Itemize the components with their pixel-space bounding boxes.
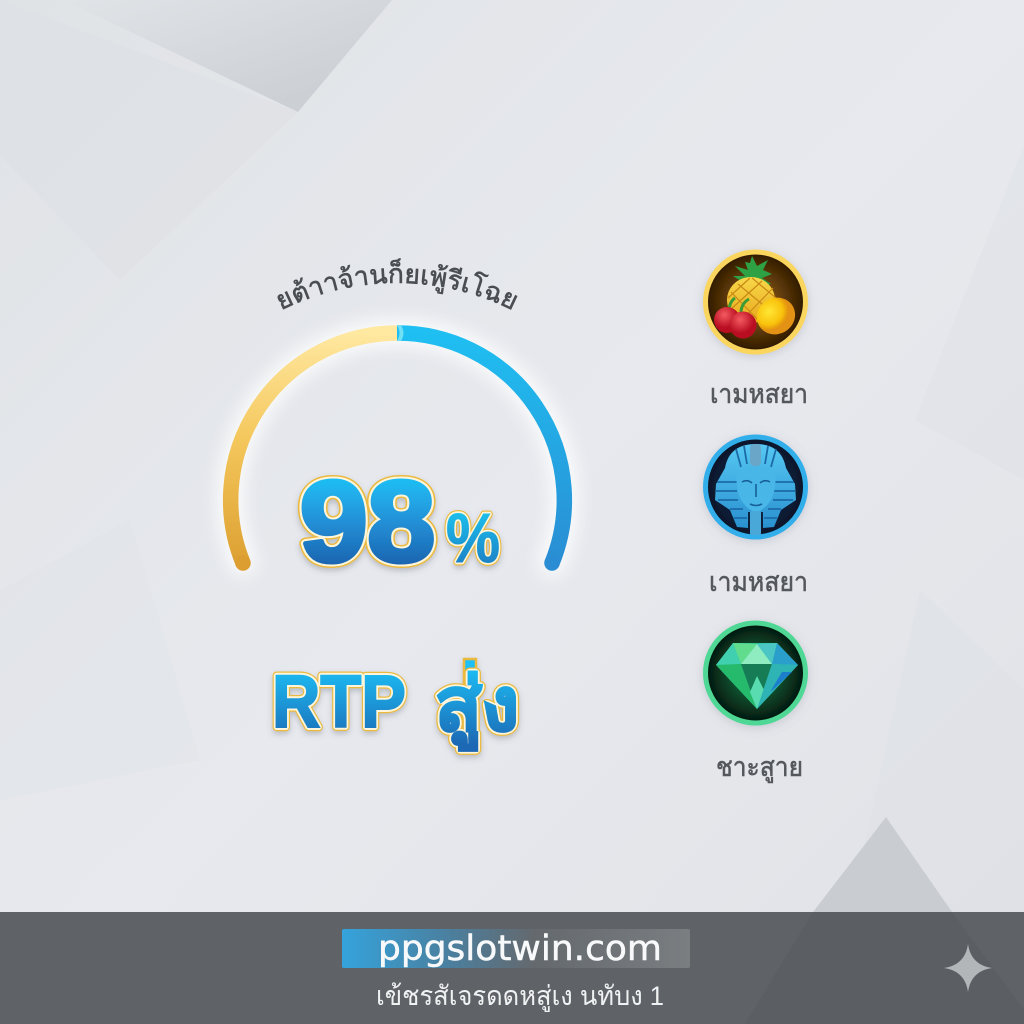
pharaoh face [737,466,775,513]
footer bar [0,912,1024,1024]
footer tagline: เข้ชรสัเจรดดหสู่เง นทับง 1 [376,981,664,1012]
pineapple body [727,277,776,323]
URL highlight [342,929,690,968]
gauge end cap right [544,555,560,571]
RTP heading: สู่ง [435,663,519,751]
label: fruit: เามหสยา [710,379,808,409]
98 percent value: 98 [300,459,435,586]
gauge arc [230,325,564,571]
RTP heading [272,659,519,751]
gauge blue segment [397,333,564,563]
gauge joint [397,325,404,341]
curved gauge caption: ยต้าาจ้านก็ยเพู้รีเโฉย [278,258,518,310]
RTP heading: RTP [272,660,406,743]
gauge end cap left [235,555,251,571]
nemes headdress [715,444,796,528]
URL text: ppgslotwin.com [378,929,662,969]
pharaoh cobra [750,444,761,466]
icon: fruit [706,252,806,352]
label: pharaoh: เามหสยา [709,567,808,597]
RTP heading: สู่ง [435,663,519,751]
lemon [750,291,802,341]
icon: pharaoh [706,437,806,537]
diamond crown and facets [716,643,798,709]
label: diamond: ชาะสูาย [716,752,803,783]
98 percent value: % [446,499,500,577]
98 percent value: % [446,499,500,577]
98 percent value: 98 [300,459,435,586]
pharaoh beard [750,511,761,535]
pineapple leaves [733,256,772,288]
RTP heading: RTP [272,660,406,743]
icon: sparkle [944,944,992,992]
cherries [714,298,756,338]
RTP heading: สู่ง [435,663,519,751]
98 percent value: % [446,499,500,577]
98 percent value [300,459,500,586]
RTP heading: RTP [272,660,406,743]
icon: diamond [706,623,806,723]
gauge gold segment [231,333,397,563]
98 percent value: 98 [300,459,435,586]
